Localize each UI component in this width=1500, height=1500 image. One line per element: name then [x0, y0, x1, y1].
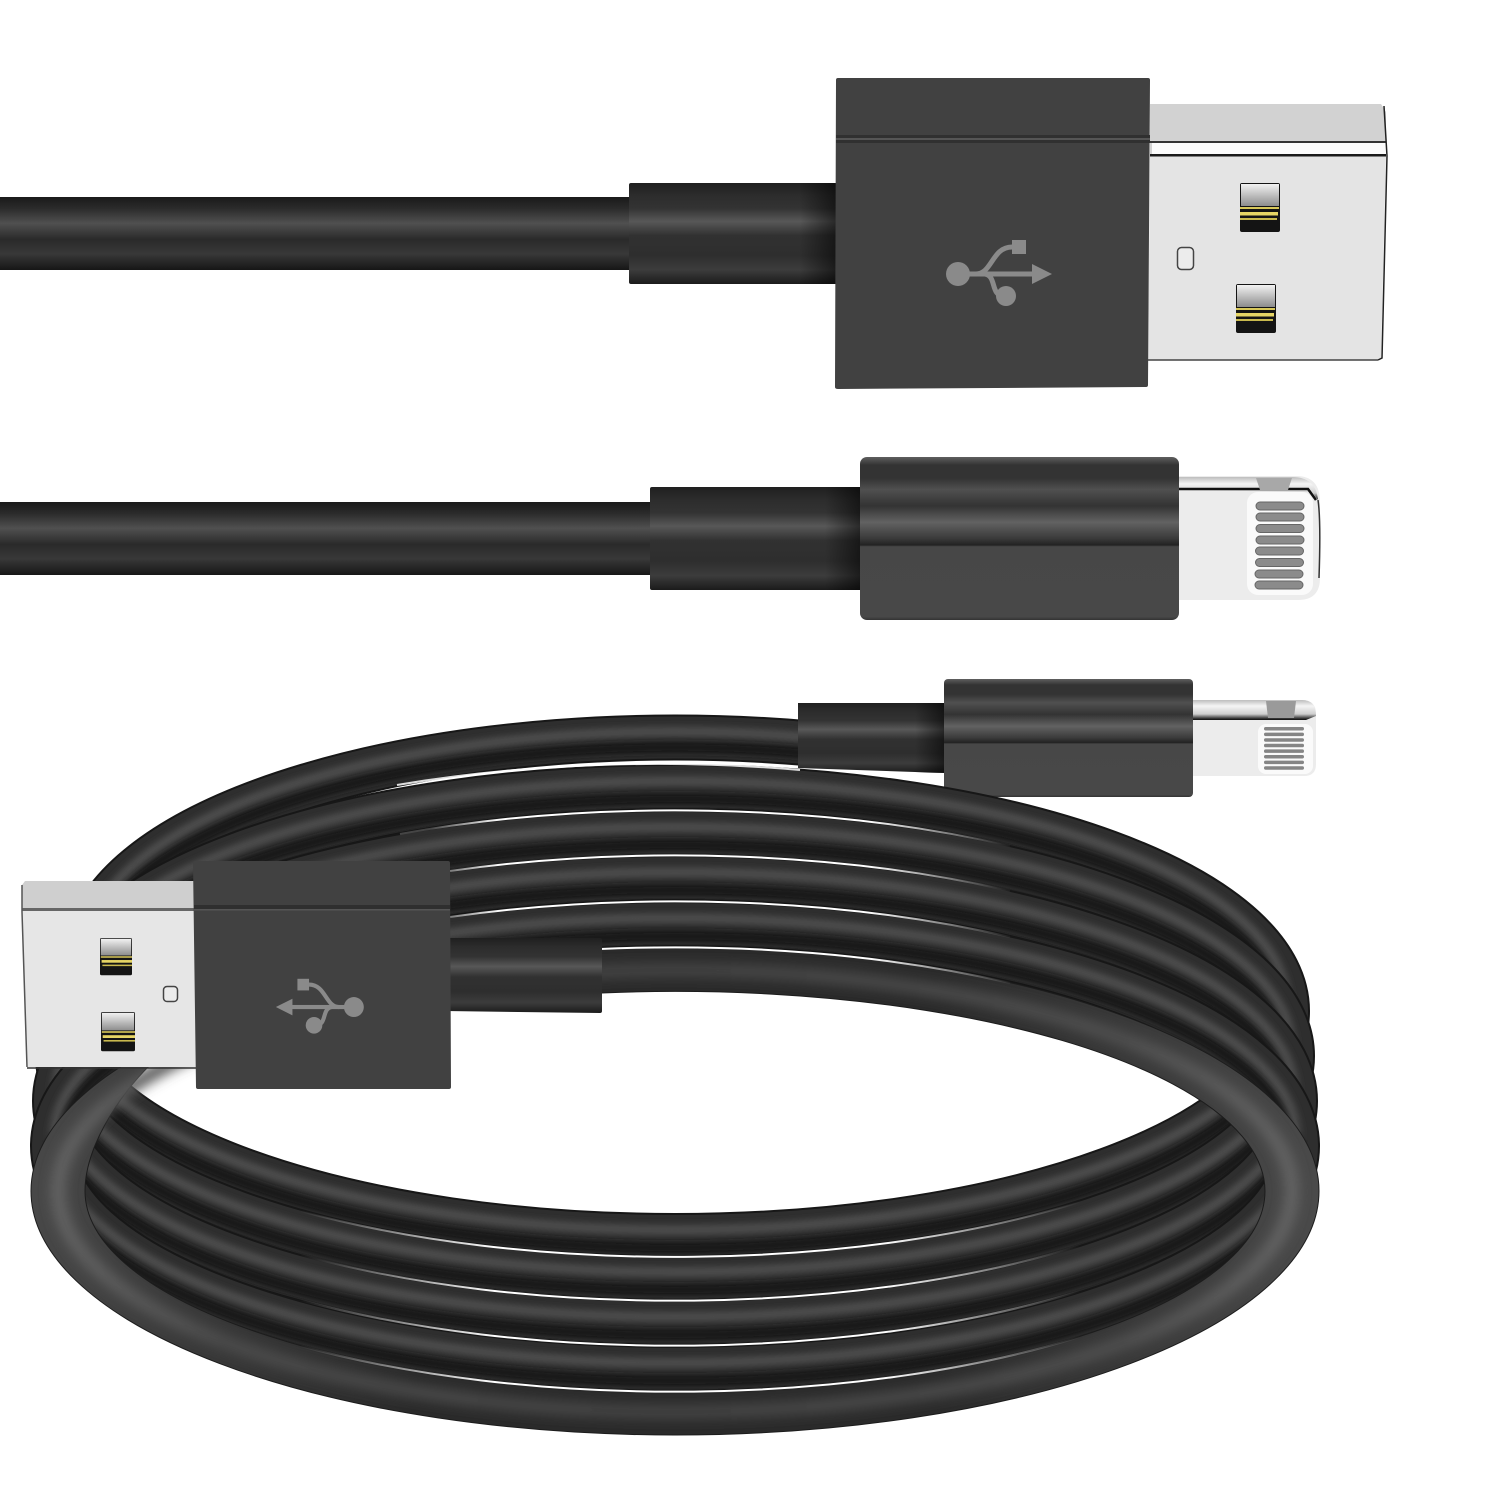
front lower strands [53, 1005, 1297, 1381]
rear upper strands [53, 781, 1297, 1158]
icon: USB trident [276, 979, 364, 1034]
Lightning plug body [860, 457, 1179, 620]
USB metal shell [1148, 104, 1387, 360]
strain relief boot [629, 183, 837, 284]
contact window upper [100, 938, 132, 975]
white gaps between strands [300, 764, 1080, 1392]
cable segment [0, 197, 632, 270]
contact panel [1247, 492, 1313, 595]
USB plug on coil [22, 861, 602, 1089]
cable segment [0, 502, 652, 575]
icon: USB trident [946, 240, 1052, 306]
Lightning metal tip [1175, 476, 1320, 600]
contact window upper [1240, 183, 1280, 232]
strain relief boot [798, 703, 945, 773]
contact pins [1264, 727, 1304, 770]
contact window lower [101, 1012, 135, 1051]
strain relief boot [650, 487, 862, 590]
strain relief boot [445, 938, 602, 1013]
small indicator square [164, 986, 178, 1002]
Lightning metal tip [1190, 700, 1316, 776]
USB plug body [835, 78, 1150, 389]
USB metal shell [22, 881, 196, 1068]
coiled cable [22, 679, 1319, 1435]
contact panel [1258, 724, 1313, 774]
Lightning plug body [944, 679, 1193, 797]
outermost wrap strand [31, 947, 1319, 1435]
USB plug body [193, 861, 451, 1089]
contact pins [1255, 502, 1304, 589]
rear top strand leading to Lightning plug [85, 732, 805, 969]
small indicator square [1178, 248, 1194, 270]
contact window lower [1236, 284, 1276, 333]
top cable: USB-A end [0, 78, 1387, 389]
Lightning plug on coil [798, 679, 1316, 797]
middle cable: Lightning end [0, 457, 1320, 620]
